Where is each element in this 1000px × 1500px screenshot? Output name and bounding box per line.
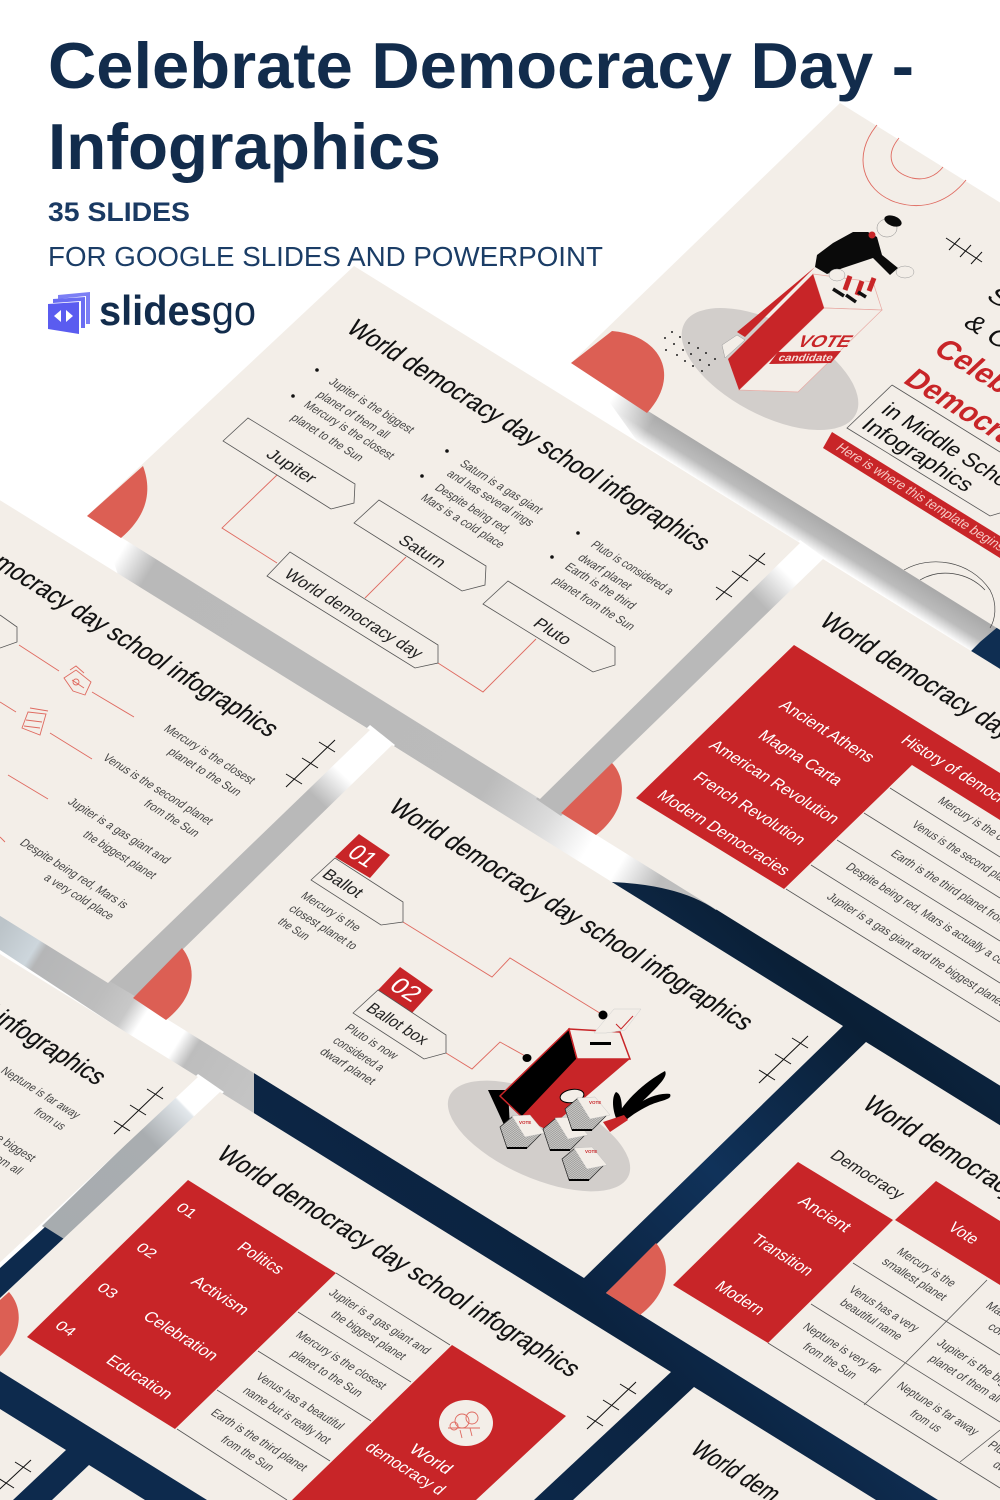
box: Jupiter: Jupiter — [262, 446, 321, 487]
timeline texts: planet to the Sun — [165, 745, 245, 798]
red panel left — [673, 1162, 893, 1343]
slide: timeline with icons — [0, 453, 370, 983]
step 1: closest planet to — [286, 902, 361, 952]
box: Pluto: Pluto — [529, 615, 576, 648]
red panel with list: Celebration — [139, 1308, 223, 1364]
timeline texts: Jupiter is a gas giant and — [65, 795, 174, 866]
slide title: World democracy day school infographics — [211, 1141, 588, 1382]
bullet text columns: planet from the Sun — [550, 574, 638, 633]
slide: democracy table — [606, 1042, 1000, 1500]
connector lines — [222, 475, 536, 692]
slide: history of democracy — [561, 559, 1000, 1090]
bullet text columns: planet of them all — [314, 388, 393, 441]
panel labels: Modern Democracies — [653, 787, 794, 879]
logo: slidesgo — [48, 287, 256, 334]
logo wordmark: slidesgo — [99, 287, 256, 334]
bullet text columns: Mars is a cold place — [418, 491, 508, 551]
timeline texts: Mercury is the closest — [161, 722, 259, 787]
slide title: World democracy day school infographics — [341, 315, 718, 556]
table text: from us — [907, 1407, 945, 1434]
crosses — [759, 1036, 808, 1083]
background: grey shadow bands between slides — [0, 365, 1000, 1242]
red panel with list: 01 — [172, 1200, 201, 1222]
red panel left: Ancient — [794, 1193, 856, 1235]
table text: Venus has a beautiful — [253, 1370, 347, 1432]
main title line 2: Infographics — [48, 110, 441, 183]
slide: three branch diagram — [87, 266, 800, 799]
outline box and connector lines — [0, 615, 17, 648]
cover title text — [823, 283, 1000, 628]
table text: the biggest planet — [328, 1308, 410, 1363]
grey ellipse — [663, 283, 877, 455]
table lines — [786, 788, 1000, 1022]
box: Saturn: Saturn — [394, 532, 450, 571]
slide: politics table — [0, 1092, 671, 1500]
table text: beautiful name — [837, 1296, 906, 1342]
illustration: vote box with person — [722, 213, 914, 392]
cover arcs — [863, 125, 966, 206]
red panel right: Vote — [944, 1219, 983, 1248]
timeline texts: a very cold place — [41, 871, 117, 922]
icon: briefcase — [64, 666, 91, 695]
red panel with list: Education — [102, 1352, 177, 1403]
vote stack 4 — [562, 1147, 607, 1180]
slide: bottom right fragment — [573, 1387, 876, 1500]
crosses — [716, 553, 765, 600]
red timeline lines — [0, 645, 134, 842]
red panel with list: 04 — [51, 1318, 80, 1340]
red callout — [292, 1345, 566, 1500]
table text — [208, 1286, 434, 1474]
box: Saturn — [354, 500, 486, 591]
timeline texts: Venus is the second planet — [100, 751, 217, 827]
timeline texts: Despite being red, Mars is — [17, 836, 132, 911]
table text — [800, 1245, 1000, 1497]
hand with feathers — [603, 1071, 670, 1132]
step 1: Mercury is the — [298, 889, 364, 934]
bullet text columns: Earth is the third — [562, 560, 639, 612]
cover crosses — [946, 238, 982, 264]
main title line 1: Celebrate Democracy Day - — [48, 29, 914, 102]
dots — [664, 331, 716, 372]
crosses — [114, 1087, 163, 1134]
bullet text columns: Mercury is the closest — [301, 398, 398, 462]
red half circle — [606, 1243, 666, 1315]
slide: bottom fragment — [52, 1465, 145, 1500]
step 2: 02 — [384, 973, 428, 1007]
step 2: considered a — [330, 1034, 388, 1074]
step 1: 01 — [342, 840, 383, 872]
table text: Neptune is very far — [800, 1320, 885, 1377]
red panel with list: 02 — [132, 1240, 161, 1262]
vote stack 1 — [500, 1115, 545, 1148]
red half circle — [0, 1292, 19, 1365]
panel labels: American Revolution — [705, 737, 844, 827]
bullet text columns: and has several rings — [444, 467, 537, 529]
red half circle — [561, 763, 622, 835]
icon: scroll — [22, 708, 48, 735]
timeline texts — [17, 722, 259, 922]
illustration: ballot box — [432, 1009, 670, 1214]
bullet text columns: Pluto is considered a — [588, 538, 677, 597]
table text: from the Sun — [800, 1340, 860, 1381]
red panel with list: Politics — [233, 1239, 289, 1278]
step 2: dwarf planet — [317, 1045, 379, 1088]
red panel — [636, 645, 1000, 889]
slide text: Neptune is far away — [0, 1064, 84, 1121]
bullet text columns: Jupiter is the biggest — [326, 375, 418, 436]
table text: Jupiter is a gas giant and — [326, 1286, 434, 1357]
timeline texts: the biggest planet — [80, 828, 160, 882]
background: navy area — [0, 625, 1000, 1500]
cover title text: Infographics — [856, 413, 980, 496]
heading: Democracy — [826, 1147, 909, 1203]
table text: planet to the Sun — [288, 1347, 366, 1399]
vote stack 2 — [543, 1117, 588, 1150]
red panel left: Transition — [747, 1231, 818, 1279]
crosses — [0, 1460, 31, 1500]
illustration: vote box with person: VOTE — [794, 331, 857, 351]
red half circle — [133, 948, 192, 1020]
panel labels: Ancient Athens — [775, 697, 879, 766]
slide: bottom left fragment — [0, 1173, 66, 1500]
red connector lines — [403, 922, 603, 1069]
bullet text columns: Saturn is a gas giant — [457, 457, 546, 516]
table lines — [177, 1273, 450, 1500]
box: Pluto — [483, 581, 615, 672]
table text: smallest planet — [879, 1255, 951, 1303]
slide: neptune fragment — [0, 800, 198, 1327]
table lines — [768, 1263, 1000, 1488]
bullet text columns — [288, 368, 677, 633]
panel labels — [653, 697, 1000, 879]
red panel left: Modern — [711, 1278, 769, 1318]
cover red half circle — [571, 331, 664, 413]
step 1 — [275, 834, 403, 952]
step 2 — [317, 967, 446, 1088]
platform line: FOR GOOGLE SLIDES AND POWERPOINT — [48, 241, 603, 272]
logo icon — [48, 292, 90, 334]
red panel with list: Activism — [187, 1273, 254, 1318]
table text: Venus has a very — [846, 1283, 923, 1335]
table text: Mercury is the — [894, 1245, 959, 1289]
slide: cover — [571, 103, 1000, 643]
red panel right — [895, 1181, 1000, 1285]
vote stack 3: VOTE — [589, 1100, 601, 1105]
table text: from the Sun — [218, 1433, 277, 1474]
table text: Mercury is the closest — [293, 1328, 390, 1392]
red callout: World — [405, 1441, 457, 1477]
red half circle — [87, 466, 147, 538]
panel labels: Magna Carta — [754, 727, 847, 789]
slide text: from us — [31, 1105, 69, 1132]
step 2: Ballot box — [362, 1000, 433, 1048]
bullet text columns: dwarf planet — [575, 551, 636, 592]
vote stack 3 — [565, 1097, 610, 1130]
table text — [824, 794, 1000, 1009]
header text — [48, 29, 914, 272]
step 1: the Sun — [275, 915, 313, 942]
bullet text columns: Despite being red, — [432, 481, 514, 536]
step 2: Pluto is now — [342, 1021, 402, 1062]
bullet text columns: planet to the Sun — [288, 411, 367, 464]
crosses — [587, 1382, 636, 1429]
timeline texts: from the Sun — [141, 797, 203, 839]
table text: name but is really hot — [240, 1384, 335, 1447]
box: World democracy day: World democracy day — [280, 566, 428, 662]
illustration: vote box with person: candidate — [776, 353, 835, 364]
vote stack 4: VOTE — [585, 1149, 597, 1154]
box: Jupiter — [223, 418, 355, 509]
slide count: 35 SLIDES — [48, 197, 190, 227]
crosses — [286, 740, 335, 787]
table text: Neptune is far away — [894, 1379, 983, 1438]
red panel with list — [27, 1180, 336, 1429]
table text: Earth is the third planet — [208, 1406, 311, 1474]
slide text — [0, 1064, 84, 1177]
red panel with list: 03 — [93, 1280, 122, 1302]
slide: ballot steps — [133, 745, 843, 1278]
slide title: World democracy day school infographics — [383, 794, 761, 1035]
step 1: Ballot — [318, 866, 368, 901]
panel labels: French Revolution — [689, 769, 810, 848]
vote stack 1: VOTE — [519, 1120, 531, 1125]
